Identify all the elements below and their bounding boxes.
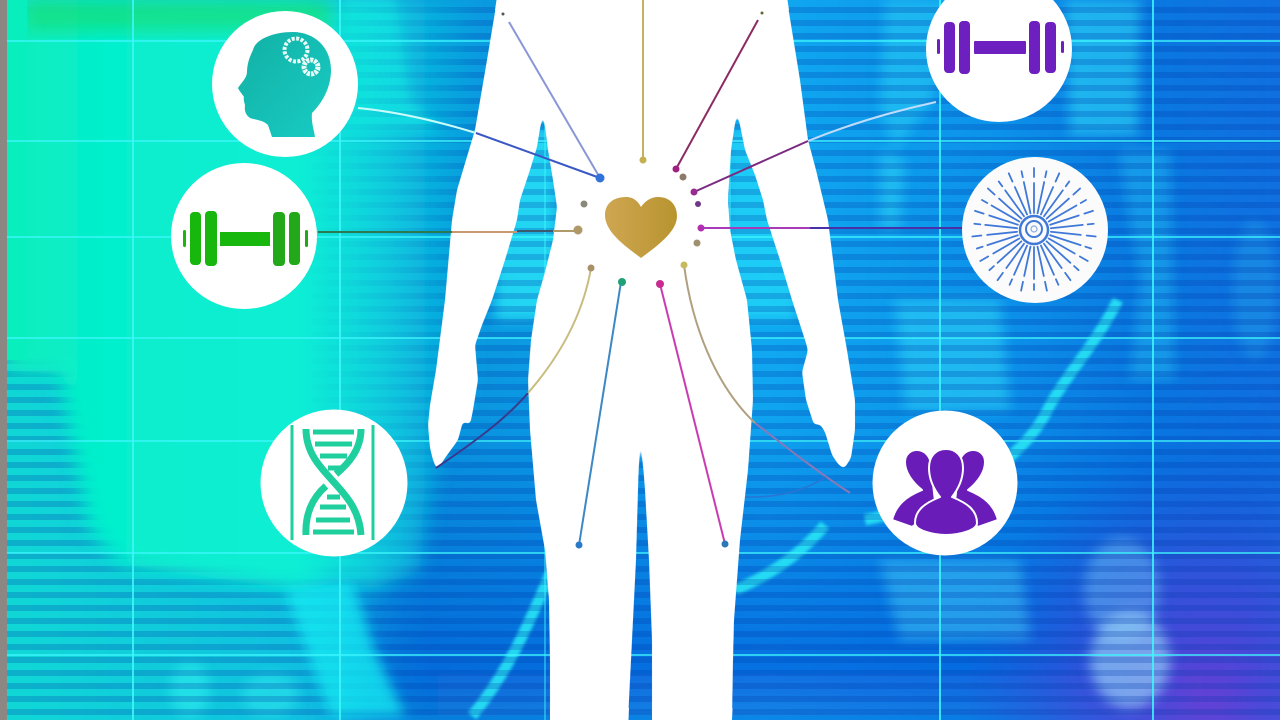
line: purple dumbbell to centre (694, 102, 936, 192)
icon: purple dumbbell (926, 0, 1072, 122)
line: top centre (642, 0, 644, 160)
icon: dna helix (260, 410, 408, 556)
icon: people group (872, 410, 1018, 556)
line: top left to centre (509, 22, 600, 178)
icon: heart (605, 197, 677, 258)
connector lines (318, 0, 962, 545)
background curved strokes (472, 300, 1118, 716)
line: lower centre right (660, 284, 725, 544)
line end dots (502, 12, 764, 548)
teal left region (7, 0, 480, 716)
line: lower centre left (579, 282, 621, 545)
line: green dumbbell to centre (318, 231, 578, 232)
line: cell to centre (701, 227, 962, 229)
line: blue curve by people icon (745, 477, 826, 497)
icon: brain head (212, 11, 358, 157)
line: dna to centre (436, 268, 591, 468)
icon: green dumbbell (171, 163, 317, 309)
human body silhouette (428, 0, 855, 720)
line: people to centre (684, 265, 850, 493)
line: brain to centre (358, 108, 600, 178)
icon: radial cell (962, 157, 1108, 303)
line: top right (676, 20, 758, 169)
left edge strip (0, 0, 7, 720)
